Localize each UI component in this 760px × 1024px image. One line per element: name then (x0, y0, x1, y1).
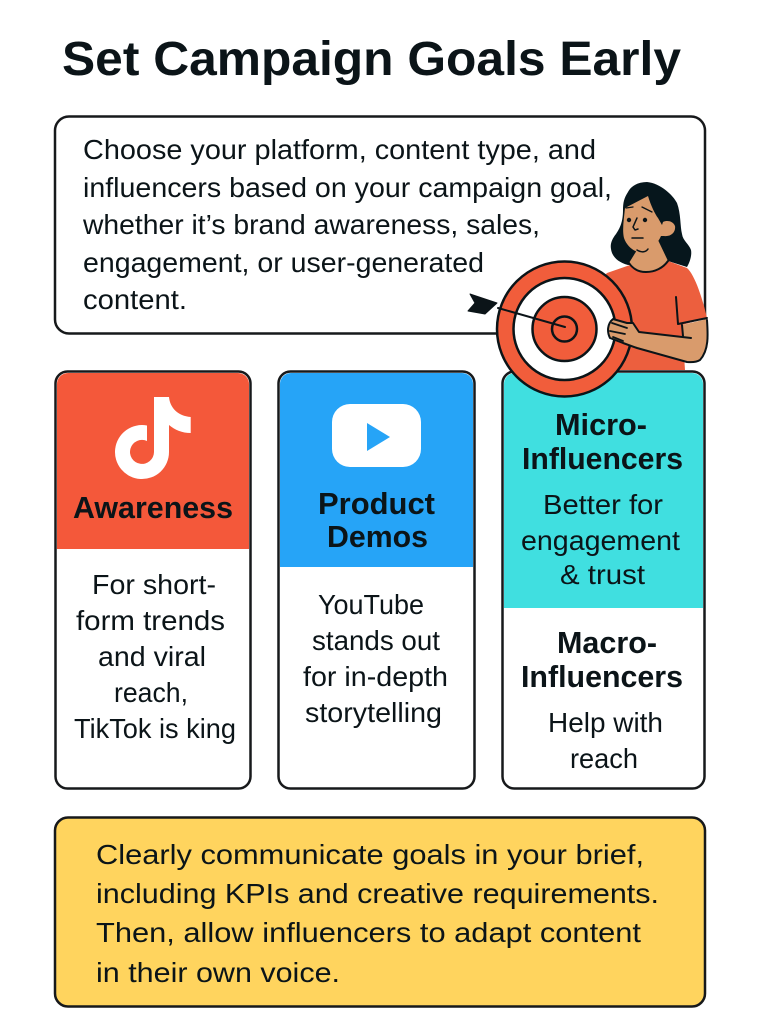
product demos body (303, 589, 448, 728)
micro-influencers body (521, 489, 680, 590)
awareness heading: Awareness (73, 490, 233, 525)
neck and face (623, 196, 675, 272)
panel: awareness card (56, 372, 250, 788)
icon: TikTok note (115, 397, 191, 479)
micro-influencers header (504, 373, 703, 608)
macro-influencers body: Help with (548, 707, 663, 738)
macro-influencers body (548, 707, 663, 774)
micro-influencers body: engagement (521, 525, 680, 556)
micro-influencers heading (522, 407, 683, 476)
illustration: woman holding target (468, 182, 708, 396)
product demos heading: Product (318, 486, 435, 521)
micro-influencers body: & trust (560, 559, 645, 590)
callout text: including KPIs and creative requirements. (96, 878, 659, 909)
product demos body: stands out (312, 625, 440, 656)
hair (611, 182, 691, 267)
icon: YouTube play (332, 404, 421, 467)
awareness header (57, 373, 249, 549)
macro-influencers heading: Macro- (557, 625, 657, 660)
product demos heading: Demos (327, 519, 428, 554)
callout text (96, 839, 659, 988)
arrow (468, 294, 565, 327)
awareness body: For short- (92, 569, 216, 600)
shirt (600, 261, 707, 370)
panel: product demos card (278, 372, 474, 788)
panel: influencers card (502, 372, 704, 788)
awareness body: form trends (76, 605, 225, 636)
macro-influencers heading: Influencers (521, 659, 683, 694)
panel: intro text box (55, 116, 705, 334)
callout text: in their own voice. (96, 957, 340, 988)
awareness body: and viral (98, 641, 206, 672)
arm and hand (608, 297, 708, 362)
product demos body: storytelling (305, 697, 442, 728)
product demos body: YouTube (318, 589, 424, 620)
awareness body (74, 569, 236, 744)
intro text: content. (83, 284, 187, 315)
intro text (82, 134, 612, 315)
title: Set Campaign Goals Early (62, 33, 681, 86)
intro text: influencers based on your campaign goal, (83, 172, 612, 203)
macro-influencers heading (521, 625, 683, 694)
product demos header (280, 373, 473, 567)
intro text: engagement, or user-generated (83, 247, 484, 278)
macro-influencers body: reach (570, 743, 638, 774)
micro-influencers heading: Influencers (522, 441, 683, 476)
awareness body: TikTok is king (74, 713, 236, 744)
product demos heading (318, 486, 435, 554)
micro-influencers body: Better for (543, 489, 663, 520)
target (497, 262, 632, 396)
intro text: whether it’s brand awareness, sales, (82, 209, 540, 240)
micro-influencers heading: Micro- (555, 407, 647, 442)
callout text: Then, allow influencers to adapt content (96, 917, 641, 948)
intro text: Choose your platform, content type, and (83, 134, 596, 165)
product demos body: for in-depth (303, 661, 448, 692)
panel: yellow callout (55, 818, 705, 1006)
awareness body: reach, (114, 677, 188, 708)
callout text: Clearly communicate goals in your brief, (96, 839, 644, 870)
